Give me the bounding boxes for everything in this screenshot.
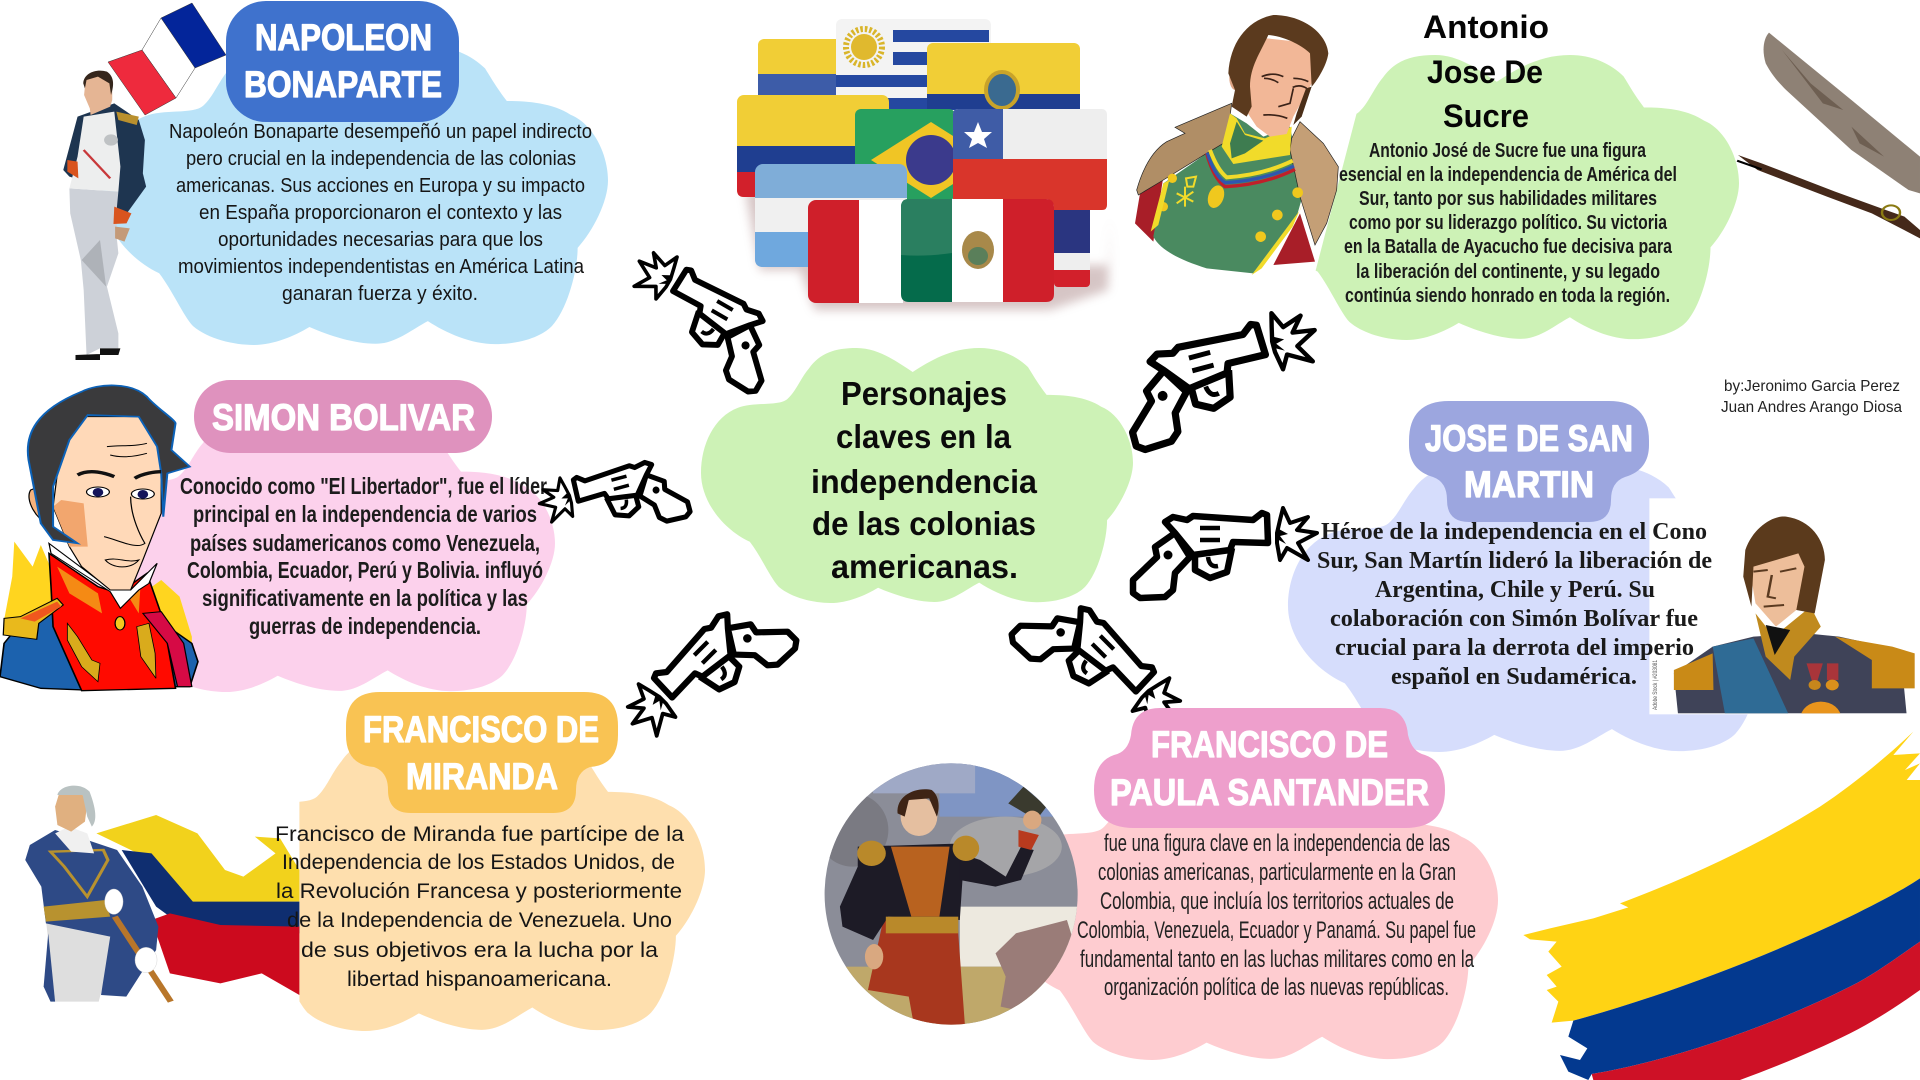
title: Antonio Jose De Sucre: Jose De [1427, 54, 1543, 90]
illustration: machete and rifle [1737, 33, 1920, 238]
text block: Santander description: organización política de las nuevas repúblicas. [1104, 974, 1449, 1001]
text block: San Martin description: Argentina, Chile y Perú. Su [1375, 577, 1655, 603]
text block: Miranda description: Francisco de Miranda fue partícipe de la [275, 823, 684, 846]
icon: revolver bottom right [1008, 577, 1192, 761]
panel: Jose de San Martin [1288, 401, 1920, 752]
text block: Napoleon description: movimientos independentistas en América Latina [178, 256, 585, 278]
title: JOSE DE SAN MARTIN [1409, 401, 1649, 522]
text block: Miranda description: Independencia de los Estados Unidos, de [282, 851, 675, 874]
text block: Sucre description: en la Batalla de Ayacucho fue decisiva para [1344, 236, 1673, 258]
text block: San Martin description: crucial para la derrota del imperio [1335, 635, 1694, 661]
portrait: Jose de San Martin: Adobe Stock | #203081 [1652, 660, 1659, 710]
text block: Simon description: Conocido como "El Libertador", fue el líder [180, 473, 547, 499]
text block: Miranda description: libertad hispanoamericana. [347, 968, 612, 991]
title: Personajes claves: claves en la [836, 418, 1012, 455]
text block: Santander description: Colombia, Venezuela, Ecuador y Panamá. Su papel fue [1077, 917, 1476, 944]
title: Personajes claves: de las colonias [812, 505, 1036, 542]
portrait: Santander oval painting [817, 760, 1082, 1027]
text block: Sucre description: Sur, tanto por sus habilidades militares [1359, 188, 1657, 210]
title: JOSE DE SAN MARTIN: JOSE DE SAN [1425, 418, 1633, 459]
text block: Simon description: países sudamericanos como Venezuela, [190, 530, 540, 556]
text block: San Martin description: Sur, San Martín lideró la liberación de [1317, 548, 1712, 574]
panel: central title [701, 348, 1133, 603]
text block: Napoleon description: en España proporcionaron el contexto y las [199, 202, 562, 224]
text block: Sucre description: Antonio José de Sucre fue una figura [1369, 140, 1647, 162]
title: SIMON BOLIVAR [194, 380, 492, 453]
title: Personajes claves: independencia [811, 463, 1038, 500]
text block: San Martin description [1317, 519, 1712, 690]
text block: San Martin description: Héroe de la independencia en el Cono [1321, 519, 1707, 545]
title: FRANCISCO DE MIRANDA [346, 692, 618, 813]
text block: Simon description: principal en la independencia de varios [193, 501, 537, 527]
title: NAPOLEON BONAPARTE: BONAPARTE [244, 64, 442, 105]
text block: San Martin description: español en Sudamérica. [1391, 664, 1637, 690]
text block: Napoleon description [169, 121, 592, 305]
portrait: Miranda with flag [0, 786, 299, 1002]
icon: French flag [108, 3, 226, 115]
credits [1721, 378, 1902, 416]
portrait: Jose de San Martin [1649, 498, 1915, 714]
text block: Napoleon description: pero crucial en la independencia de las colonias [186, 148, 576, 170]
title: Personajes claves: americanas. [831, 548, 1018, 585]
cloud background: San Martin [1288, 466, 1791, 752]
text block: Simon description [180, 473, 547, 639]
text block: Santander description: Colombia, que incluía los territorios actuales de [1100, 888, 1454, 915]
portrait: Simon Bolivar [0, 385, 198, 691]
credits: by:Jeronimo Garcia Perez [1724, 378, 1900, 395]
portrait: Antonio Jose de Sucre [1135, 15, 1338, 275]
text block: Miranda description: de la Independencia de Venezuela. Uno [287, 909, 672, 932]
text block: Simon description: significativamente en la política y las [202, 585, 528, 611]
text block: Miranda description: la Revolución Francesa y posteriormente [276, 880, 682, 903]
text block: Santander description: fundamental tanto en las luchas militares como en la [1080, 946, 1474, 973]
title: FRANCISCO DE PAULA SANTANDER [1094, 708, 1445, 828]
text block: Santander description: colonias americanas, particularmente en la Gran [1098, 859, 1456, 886]
title: Antonio Jose De Sucre: Sucre [1443, 98, 1529, 134]
title: Personajes claves: Personajes [841, 375, 1007, 412]
panel: Simon Bolivar [0, 380, 555, 692]
text block: San Martin description: colaboración con Simón Bolívar fue [1330, 606, 1698, 632]
text block: Sucre description: como por su liderazgo político. Su victoria [1349, 212, 1668, 234]
cloud background: Santander [1004, 770, 1498, 1060]
cloud background: Miranda [220, 738, 705, 1031]
credits: Juan Andres Arango Diosa [1721, 399, 1902, 416]
illustration: Colombian flag brush stroke [1523, 732, 1920, 1080]
icon: revolver bottom left [616, 583, 800, 767]
title: FRANCISCO DE MIRANDA: MIRANDA [406, 756, 558, 797]
cloud background: centre [701, 348, 1133, 603]
text block: Santander description: fue una figura clave en la independencia de las [1104, 830, 1450, 857]
icon: revolver left middle [534, 448, 691, 553]
text block: Sucre description: la liberación del continente, y su legado [1356, 261, 1660, 283]
cloud background: Napoleon [102, 46, 608, 345]
text block: Sucre description [1339, 140, 1677, 307]
text block: Simon description: guerras de independencia. [249, 613, 481, 639]
title: FRANCISCO DE PAULA SANTANDER: PAULA SANTANDER [1110, 772, 1429, 813]
text block: Napoleon description: oportunidades necesarias para que los [218, 229, 543, 251]
illustration: South American flags cluster [737, 19, 1110, 310]
title: FRANCISCO DE PAULA SANTANDER: FRANCISCO DE [1151, 724, 1388, 765]
text block: Sucre description: continúa siendo honrado en toda la región. [1345, 285, 1670, 307]
cloud background: Simon [85, 422, 555, 692]
cloud background: Sucre [1264, 55, 1739, 340]
text block: Miranda description: de sus objetivos era la lucha por la [301, 939, 658, 962]
text block: Napoleon description: Napoleón Bonaparte desempeñó un papel indirecto [169, 121, 592, 143]
title: Antonio Jose De Sucre [1423, 9, 1549, 134]
panel: Napoleon Bonaparte [63, 1, 608, 360]
title: SIMON BOLIVAR: SIMON BOLIVAR [212, 397, 475, 438]
text block: Sucre description: esencial en la independencia de América del [1339, 164, 1677, 186]
title: NAPOLEON BONAPARTE [226, 1, 459, 122]
text block: Santander description [1077, 830, 1476, 1001]
text block: Miranda description [275, 823, 684, 991]
title: JOSE DE SAN MARTIN: MARTIN [1464, 464, 1594, 505]
text block: Napoleon description: ganaran fuerza y éxito. [282, 283, 478, 305]
icon: revolver top right [1112, 304, 1333, 452]
icon: revolver top left [610, 242, 794, 395]
text block: Napoleon description: americanas. Sus acciones en Europa y su impacto [176, 175, 585, 197]
panel: Francisco de Miranda [0, 692, 705, 1031]
title: NAPOLEON BONAPARTE: NAPOLEON [255, 17, 432, 58]
icon: revolver right middle [1133, 508, 1317, 598]
text block: Simon description: Colombia, Ecuador, Perú y Bolivia. influyó [187, 557, 543, 583]
panel: Antonio Jose de Sucre [1135, 9, 1739, 340]
title: Antonio Jose De Sucre: Antonio [1423, 9, 1549, 45]
panel: Francisco de Paula Santander [817, 708, 1498, 1060]
title: Personajes claves [811, 375, 1038, 585]
title: FRANCISCO DE MIRANDA: FRANCISCO DE [363, 709, 599, 750]
portrait: Napoleon figure [63, 71, 146, 360]
